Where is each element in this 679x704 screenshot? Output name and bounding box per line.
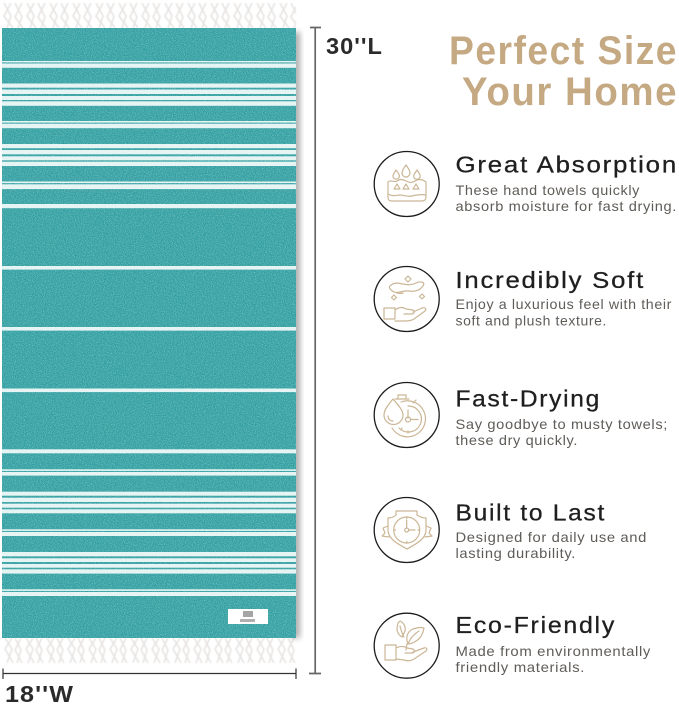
- top fringe: [2, 3, 296, 28]
- description: [456, 643, 651, 675]
- heading: Great Absorption: [456, 152, 678, 178]
- feature: built to last: [374, 498, 647, 562]
- description: lasting durability.: [456, 545, 576, 561]
- towel shadow: [292, 32, 300, 638]
- towel illustration: [2, 3, 300, 663]
- description: [456, 182, 677, 214]
- feature: eco-friendly: [374, 612, 651, 678]
- height dimension line: [309, 28, 321, 674]
- icon: hand with soft fabric: [374, 266, 439, 332]
- feature: incredibly soft: [374, 266, 672, 332]
- heading: Incredibly Soft: [456, 267, 645, 293]
- feature: fast-drying: [374, 382, 668, 448]
- heading: Eco-Friendly: [456, 612, 616, 638]
- description: [456, 529, 647, 561]
- description: friendly materials.: [456, 659, 585, 675]
- description: absorb moisture for fast drying.: [456, 198, 677, 214]
- towel body: [2, 28, 296, 638]
- icon: drop and stopwatch: [374, 382, 439, 448]
- height label: 30''L: [326, 33, 383, 59]
- width dimension line: [3, 668, 296, 679]
- description: These hand towels quickly: [456, 182, 640, 198]
- description: Enjoy a luxurious feel with their: [456, 296, 672, 312]
- towel weave texture: [2, 28, 296, 638]
- description: Designed for daily use and: [456, 529, 647, 545]
- description: [456, 416, 668, 448]
- title: [449, 29, 678, 114]
- description: these dry quickly.: [456, 432, 578, 448]
- feature: great absorption: [374, 152, 678, 216]
- towel stripes: [2, 61, 296, 596]
- icon: water drops in towel: [374, 152, 439, 216]
- towel label: [228, 609, 268, 624]
- description: Say goodbye to musty towels;: [456, 416, 668, 432]
- icon: hand with leaves: [374, 613, 439, 678]
- heading: Fast-Drying: [456, 386, 601, 412]
- bottom fringe: [2, 638, 296, 663]
- description: Made from environmentally: [456, 643, 651, 659]
- heading: Built to Last: [456, 500, 606, 526]
- description: soft and plush texture.: [456, 312, 607, 328]
- description: [456, 296, 672, 328]
- icon: shield with clock: [374, 498, 439, 562]
